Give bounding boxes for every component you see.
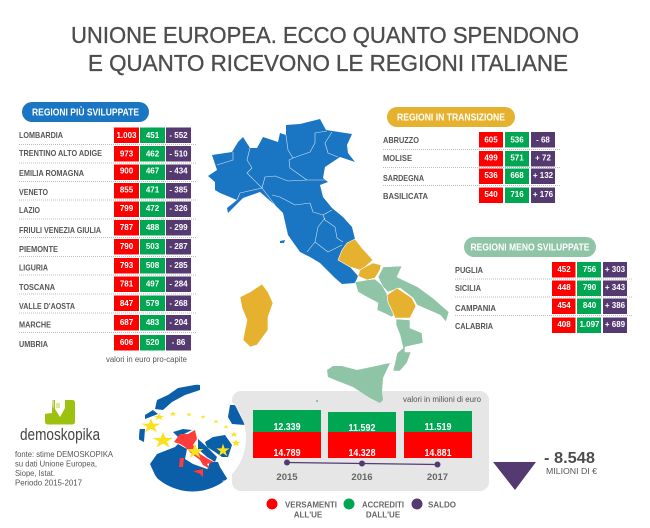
- globe with Italy and EU stars: [138, 384, 246, 495]
- saldo timeline: 2016: [351, 472, 373, 483]
- row: Molise: MOLISE: [383, 154, 412, 163]
- row: Abruzzo: 536: [510, 136, 524, 144]
- row: Toscana: 781: [120, 280, 134, 288]
- row: Veneto: - 385: [169, 186, 188, 194]
- row: Trentino Alto Adige: TRENTINO ALTO ADIGE: [19, 149, 102, 158]
- row: Sicilia: SICILIA: [455, 284, 481, 293]
- row: Valle d'Aosta: 579: [146, 299, 160, 308]
- row: Puglia: 452: [557, 265, 571, 274]
- row: Lombardia: - 552: [169, 131, 188, 140]
- row: Sicilia: 448: [557, 283, 571, 292]
- row: Abruzzo: [383, 132, 555, 148]
- row: Toscana: TOSCANA: [19, 283, 55, 292]
- row: Friuli Venezia Giulia: 488: [146, 223, 160, 232]
- row: Sardegna: 536: [484, 171, 498, 180]
- source text: su dati Unione Europea,: [15, 460, 97, 468]
- row: Umbria: 606: [120, 338, 134, 347]
- source text: Siope, Istat.: [15, 469, 55, 478]
- bar: 2017: 14.881: [424, 448, 452, 459]
- row: Marche: 687: [120, 318, 134, 327]
- legend item: accrediti: [344, 498, 404, 520]
- row: Molise: + 72: [535, 154, 551, 162]
- icon: down triangle: [493, 462, 536, 490]
- bar: 2016: 11.592: [348, 423, 376, 434]
- row: Lazio: 472: [146, 204, 160, 213]
- pill: regioni più sviluppate: REGIONI PIÙ SVILUPPATE: [32, 106, 139, 118]
- row: Piemonte: 790: [120, 242, 134, 251]
- title: E QUANTO RICEVONO LE REGIONI ITALIANE: [88, 50, 568, 76]
- row: Puglia: [455, 262, 627, 278]
- row: Sardegna: [383, 168, 555, 184]
- row: Valle d'Aosta: 847: [120, 299, 134, 308]
- table: regioni in transizione: [383, 132, 561, 203]
- row: Basilicata: [383, 188, 555, 203]
- table: regioni meno sviluppate: [455, 262, 633, 333]
- row: Basilicata: 540: [484, 190, 498, 199]
- pill: regioni meno sviluppate: REGIONI MENO SVILUPPATE: [470, 242, 590, 254]
- row: Liguria: [19, 258, 191, 274]
- row: Sicilia: [455, 280, 627, 296]
- pill: regioni in transizione: [387, 107, 515, 127]
- row: Lombardia: LOMBARDIA: [19, 131, 63, 140]
- saldo timeline: 2015: [276, 472, 298, 483]
- row: Trentino Alto Adige: [19, 146, 191, 162]
- row: Liguria: - 285: [169, 261, 188, 270]
- logo: demoskopika: demoskopika: [20, 426, 101, 444]
- row: Emilia Romagna: - 434: [169, 166, 188, 176]
- row: Lombardia: 451: [146, 131, 160, 140]
- bar: 2017: [404, 411, 472, 459]
- row: Calabria: [455, 318, 627, 333]
- logo: demoskopika: [20, 399, 101, 444]
- row: Lazio: LAZIO: [19, 206, 41, 215]
- row: Emilia Romagna: EMILIA ROMAGNA: [19, 169, 84, 178]
- row: Piemonte: - 287: [169, 242, 188, 251]
- row: Umbria: 520: [146, 338, 160, 347]
- row: Basilicata: BASILICATA: [383, 192, 428, 201]
- row: Valle d'Aosta: - 268: [169, 299, 188, 308]
- row: Marche: - 204: [169, 318, 188, 327]
- row: Molise: 499: [484, 154, 498, 162]
- row: Friuli Venezia Giulia: - 299: [169, 223, 188, 232]
- row: Puglia: + 303: [605, 265, 626, 274]
- row: Umbria: [19, 335, 191, 350]
- source text: [15, 450, 113, 488]
- row: Veneto: [19, 183, 191, 198]
- row: Abruzzo: 605: [484, 136, 498, 144]
- stacked bar chart: versamenti e accrediti: [253, 410, 472, 459]
- row: Piemonte: 503: [146, 242, 160, 251]
- row: Friuli Venezia Giulia: [19, 220, 191, 236]
- bar: 2016: [328, 412, 396, 459]
- row: Calabria: 1.097: [579, 320, 600, 329]
- source text: Periodo 2015-2017: [15, 478, 82, 488]
- row: Lazio: [19, 202, 191, 217]
- legend: [266, 498, 456, 520]
- row: Calabria: CALABRIA: [455, 322, 493, 331]
- row: Molise: 571: [510, 154, 524, 162]
- row: Lombardia: 1.003: [116, 131, 137, 140]
- bar: 2015: [253, 410, 321, 459]
- source text: fonte: stime DEMOSKOPIKA: [15, 450, 113, 459]
- row: Umbria: UMBRIA: [19, 340, 48, 349]
- region group: transition (yellow): [240, 239, 381, 347]
- row: Veneto: VENETO: [19, 188, 49, 197]
- note: valori pro-capite: valori in euro pro-capite: [106, 355, 188, 364]
- row: Trentino Alto Adige: 973: [120, 150, 134, 158]
- row: Veneto: 471: [146, 186, 160, 194]
- title: [71, 22, 579, 76]
- total saldo: [544, 450, 597, 476]
- row: Campania: 840: [583, 301, 597, 310]
- saldo timeline: [276, 460, 448, 483]
- row: Sardegna: 668: [510, 171, 524, 180]
- map of Italy: [208, 119, 449, 403]
- note: valori in milioni: valori in milioni di euro: [403, 395, 482, 404]
- row: Lazio: - 326: [169, 204, 188, 213]
- row: Friuli Venezia Giulia: 787: [120, 223, 134, 232]
- row: Molise: [383, 151, 555, 166]
- row: Basilicata: 716: [510, 190, 524, 199]
- row: Trentino Alto Adige: 462: [146, 150, 160, 158]
- legend item: saldo: [412, 498, 456, 510]
- title: UNIONE EUROPEA. ECCO QUANTO SPENDONO: [71, 22, 579, 48]
- row: Abruzzo: ABRUZZO: [383, 136, 420, 145]
- pill: regioni meno sviluppate: [464, 237, 596, 257]
- row: Piemonte: [19, 239, 191, 254]
- total saldo: - 8.548: [544, 450, 595, 467]
- row: Toscana: 497: [146, 280, 160, 288]
- row: Marche: 483: [146, 318, 160, 327]
- row: Lombardia: [19, 128, 191, 143]
- row: Campania: 454: [557, 301, 571, 310]
- row: Sardegna: SARDEGNA: [383, 174, 424, 183]
- row: Emilia Romagna: [19, 164, 191, 180]
- bar: 2015: 12.339: [274, 422, 301, 433]
- bar: 2017: 11.519: [424, 422, 452, 433]
- row: Friuli Venezia Giulia: FRIULI VENEZIA GIULIA: [19, 226, 101, 235]
- panel: grey chart background: [232, 391, 489, 491]
- row: Calabria: 408: [557, 320, 571, 329]
- row: Veneto: 855: [120, 186, 134, 194]
- total saldo: MILIONI DI €: [546, 466, 597, 476]
- row: Marche: MARCHE: [19, 320, 51, 330]
- row: Campania: + 386: [605, 301, 626, 310]
- saldo timeline: 2017: [427, 472, 448, 483]
- row: Umbria: - 86: [172, 338, 186, 347]
- row: Basilicata: + 176: [533, 190, 554, 199]
- row: Sicilia: 790: [583, 283, 597, 292]
- legend item: accrediti: ACCREDITI: [362, 500, 404, 510]
- row: Valle d'Aosta: VALLE D'AOSTA: [19, 302, 75, 311]
- row: Campania: [455, 298, 627, 314]
- row: Piemonte: PIEMONTE: [19, 245, 58, 254]
- region: Basilicata (yellow): [387, 288, 416, 318]
- region group: more developed (blue): [208, 119, 358, 284]
- row: Emilia Romagna: 467: [146, 166, 160, 176]
- icon: logo mark: [44, 399, 75, 424]
- row: Lazio: 799: [120, 204, 134, 213]
- row: Sardegna: + 132: [533, 171, 554, 180]
- row: Emilia Romagna: 900: [120, 166, 134, 176]
- legend item: versamenti: ALL'UE: [294, 510, 323, 520]
- row: Marche: [19, 315, 191, 330]
- bar: 2016: 14.328: [348, 448, 376, 459]
- legend item: versamenti: [266, 498, 337, 520]
- legend item: versamenti: VERSAMENTI: [285, 500, 337, 510]
- row: Liguria: LIGURIA: [19, 264, 48, 272]
- row: Sicilia: + 343: [605, 283, 626, 292]
- row: Puglia: PUGLIA: [455, 266, 483, 275]
- table: regioni più sviluppate: [19, 128, 196, 350]
- row: Trentino Alto Adige: - 510: [169, 150, 188, 158]
- row: Liguria: 793: [120, 261, 134, 270]
- row: Puglia: 756: [583, 265, 597, 274]
- legend item: accrediti: DALL'UE: [366, 510, 401, 520]
- bar: 2015: 14.789: [274, 448, 301, 459]
- row: Toscana: [19, 276, 191, 292]
- pill: regioni in transizione: REGIONI IN TRANSIZIONE: [397, 112, 505, 124]
- row: Abruzzo: - 68: [536, 136, 550, 144]
- row: Calabria: + 689: [605, 320, 626, 329]
- region group: less developed (green): [316, 266, 449, 403]
- row: Toscana: - 284: [169, 280, 188, 288]
- pill: regioni più sviluppate: [22, 102, 149, 122]
- row: Liguria: 508: [146, 261, 160, 270]
- legend item: saldo: SALDO: [428, 500, 456, 510]
- row: Campania: CAMPANIA: [455, 304, 496, 313]
- row: Valle d'Aosta: [19, 296, 191, 311]
